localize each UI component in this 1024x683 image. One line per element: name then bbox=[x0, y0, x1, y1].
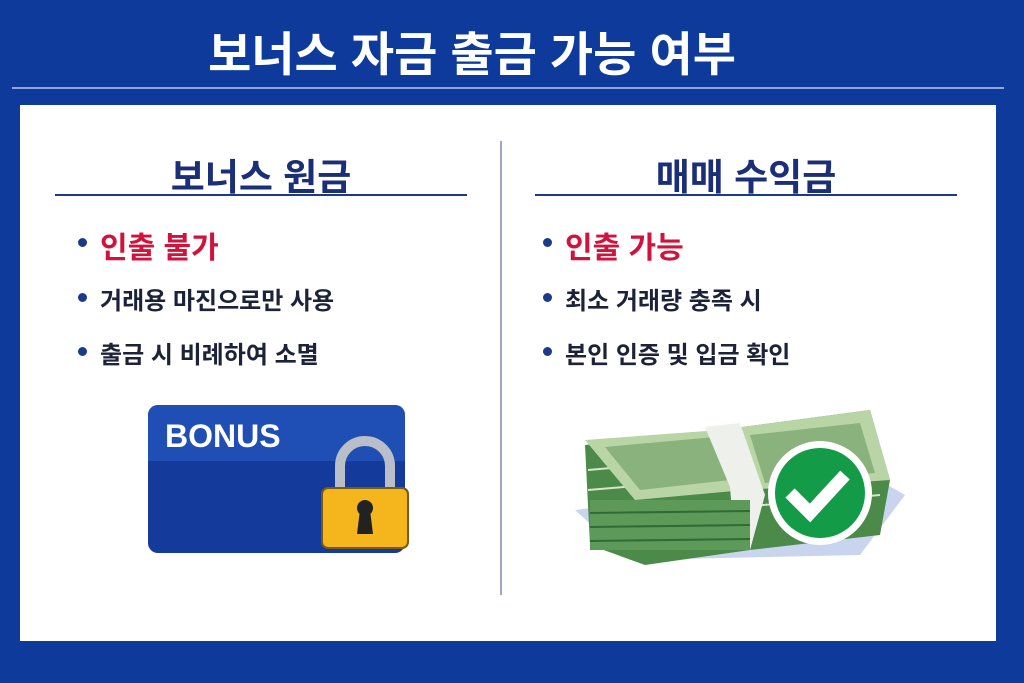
title: 보너스 자금 출금 가능 여부 bbox=[208, 28, 736, 81]
icon: bonus card with lock: BONUS bbox=[165, 418, 281, 454]
icon: money stack with check bbox=[575, 410, 905, 565]
list: bonus bbox=[78, 232, 334, 369]
list: bonus: 인출 불가 bbox=[100, 232, 219, 265]
panel: main bbox=[20, 105, 996, 641]
list: profit bbox=[543, 232, 790, 369]
list: bonus: 거래용 마진으로만 사용 bbox=[100, 288, 334, 315]
list: profit: 인출 가능 bbox=[565, 232, 684, 265]
heading: bonus principal: 보너스 원금 bbox=[171, 157, 351, 198]
list: bonus: 출금 시 비례하여 소멸 bbox=[100, 342, 319, 369]
heading: trading profit: 매매 수익금 bbox=[656, 157, 836, 198]
list: profit: 본인 인증 및 입금 확인 bbox=[565, 342, 790, 369]
list: profit: 최소 거래량 충족 시 bbox=[565, 288, 762, 315]
icon: bonus card with lock bbox=[148, 405, 409, 553]
